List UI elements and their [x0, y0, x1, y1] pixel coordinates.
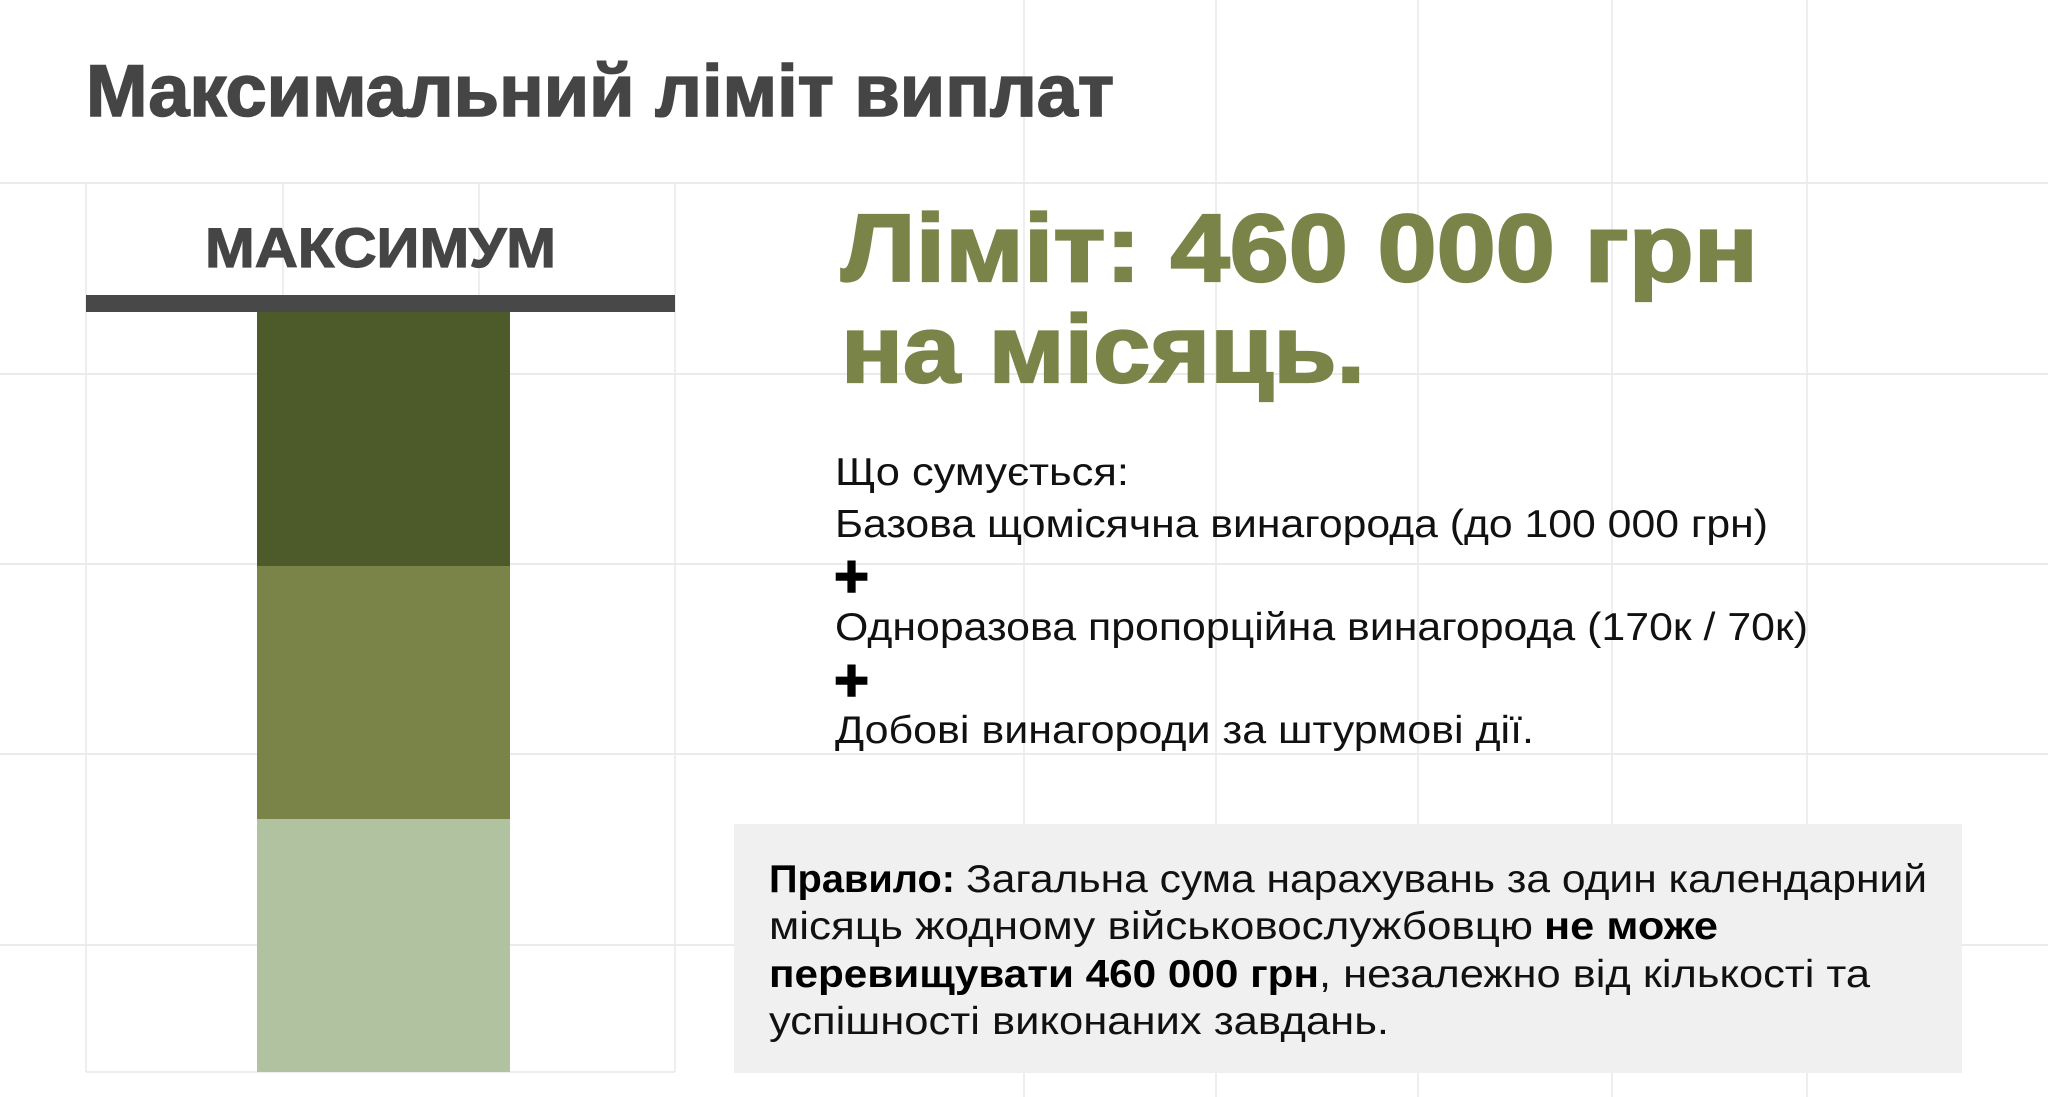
heading: maximum label: МАКСИМУМ — [205, 216, 556, 279]
text block: what is summed: Добові винагороди за штурмові дії. — [835, 709, 1534, 752]
bar segment: light — [257, 819, 510, 1072]
text block: what is summed: Що сумується: — [835, 451, 1129, 494]
title: Максимальний ліміт виплат — [86, 51, 1114, 132]
callout: rule: Загальна сума нарахувань за один календарний — [966, 858, 1927, 901]
callout: rule — [734, 824, 1962, 1073]
bar segment: medium — [257, 566, 510, 819]
icon: plus: + — [834, 647, 869, 714]
panel: stacked maximum bar — [86, 216, 675, 1072]
heading: limit amount — [841, 195, 1758, 403]
callout: rule: успішності виконаних завдань. — [769, 1000, 1389, 1043]
text block: what is summed: Одноразова пропорційна винагорода (170к / 70к) — [835, 606, 1808, 649]
icon: plus: + — [834, 543, 869, 610]
bar segment: dark — [257, 312, 510, 566]
heading: limit amount: Ліміт: 460 000 грн — [841, 195, 1758, 302]
callout: rule: , незалежно від кількості та — [1319, 953, 1870, 996]
callout: rule: перевищувати 460 000 грн — [769, 953, 1319, 996]
callout: rule: Правило: — [769, 858, 955, 901]
limit line — [86, 295, 675, 312]
text block: what is summed — [834, 451, 1808, 752]
callout: rule: місяць жодному військовослужбовцю — [769, 905, 1533, 948]
text block: what is summed: Базова щомісячна винагорода (до 100 000 грн) — [835, 503, 1768, 546]
heading: limit amount: на місяць. — [841, 296, 1365, 403]
callout: rule: не може — [1544, 905, 1718, 948]
